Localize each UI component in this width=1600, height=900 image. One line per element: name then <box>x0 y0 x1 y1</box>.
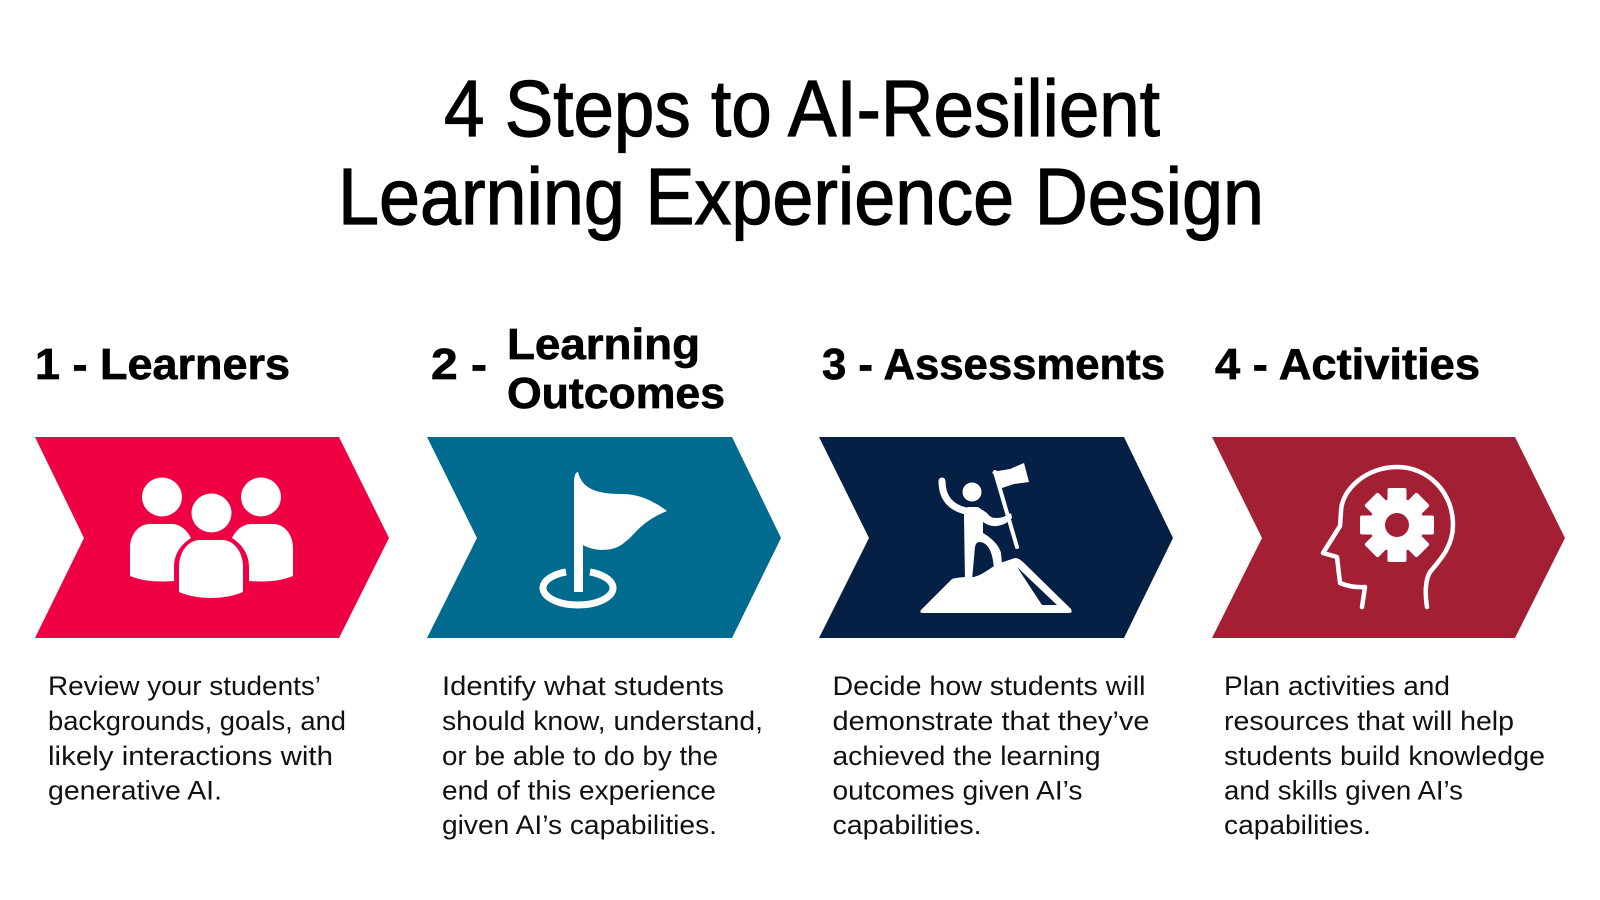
panel: step 2 learning outcomes <box>427 320 781 840</box>
text: assessments description <box>832 671 1150 840</box>
text: activities description: and skills given AI’s <box>1224 776 1463 806</box>
chevron: activities <box>1212 437 1565 638</box>
text: learning outcomes description: should know, understand, <box>442 706 763 736</box>
heading: 2 - Learning Outcomes <box>431 320 725 418</box>
heading: 4 - Activities: 4 - Activities <box>1215 340 1480 389</box>
text: activities description: students build knowledge <box>1224 741 1545 771</box>
text: assessments description: capabilities. <box>832 810 982 840</box>
heading: 2 - Learning Outcomes: Learning <box>507 320 700 369</box>
text: activities description: capabilities. <box>1224 810 1371 840</box>
text: activities description: resources that will help <box>1224 706 1514 736</box>
text: learners description: likely interactions with <box>48 741 333 771</box>
text: learning outcomes description: end of this experience <box>442 776 716 806</box>
title: Learning Experience Design <box>338 152 1264 241</box>
chevron: learning outcomes <box>427 437 781 638</box>
text: learning outcomes description: Identify what students <box>442 671 724 701</box>
title: 4 Steps to AI-Resilient <box>444 64 1160 153</box>
text: learners description: Review your students’ <box>48 671 321 701</box>
text: activities description <box>1224 671 1545 840</box>
text: learning outcomes description <box>442 671 763 840</box>
text: assessments description: outcomes given AI’s <box>832 776 1082 806</box>
title <box>338 64 1264 241</box>
text: learners description: backgrounds, goals, and <box>48 706 346 736</box>
icon: group of people <box>130 478 293 598</box>
icon: climber with flag on mountain <box>920 463 1072 613</box>
text: learning outcomes description: given AI’s capabilities. <box>442 810 717 840</box>
panel: step 4 activities <box>1212 340 1565 840</box>
text: assessments description: achieved the learning <box>832 741 1100 771</box>
chevron: learners <box>35 437 389 638</box>
icon: flag on target <box>543 472 667 605</box>
text: activities description: Plan activities and <box>1224 671 1450 701</box>
text: learning outcomes description: or be able to do by the <box>442 741 718 771</box>
panel: step 3 assessments <box>819 340 1173 840</box>
chevron: assessments <box>819 437 1173 638</box>
icon: head with gear <box>1323 467 1453 607</box>
text: learners description: generative AI. <box>48 776 222 806</box>
heading: 2 - Learning Outcomes: Outcomes <box>507 369 725 418</box>
heading: 1 - Learners: 1 - Learners <box>35 340 290 389</box>
text: learners description <box>48 671 346 806</box>
panel: step 1 learners <box>35 340 389 806</box>
text: assessments description: demonstrate that they’ve <box>832 706 1150 736</box>
heading: 3 - Assessments: 3 - Assessments <box>822 340 1165 389</box>
heading: 2 - Learning Outcomes: 2 - <box>431 340 487 389</box>
text: assessments description: Decide how students will <box>832 671 1146 701</box>
